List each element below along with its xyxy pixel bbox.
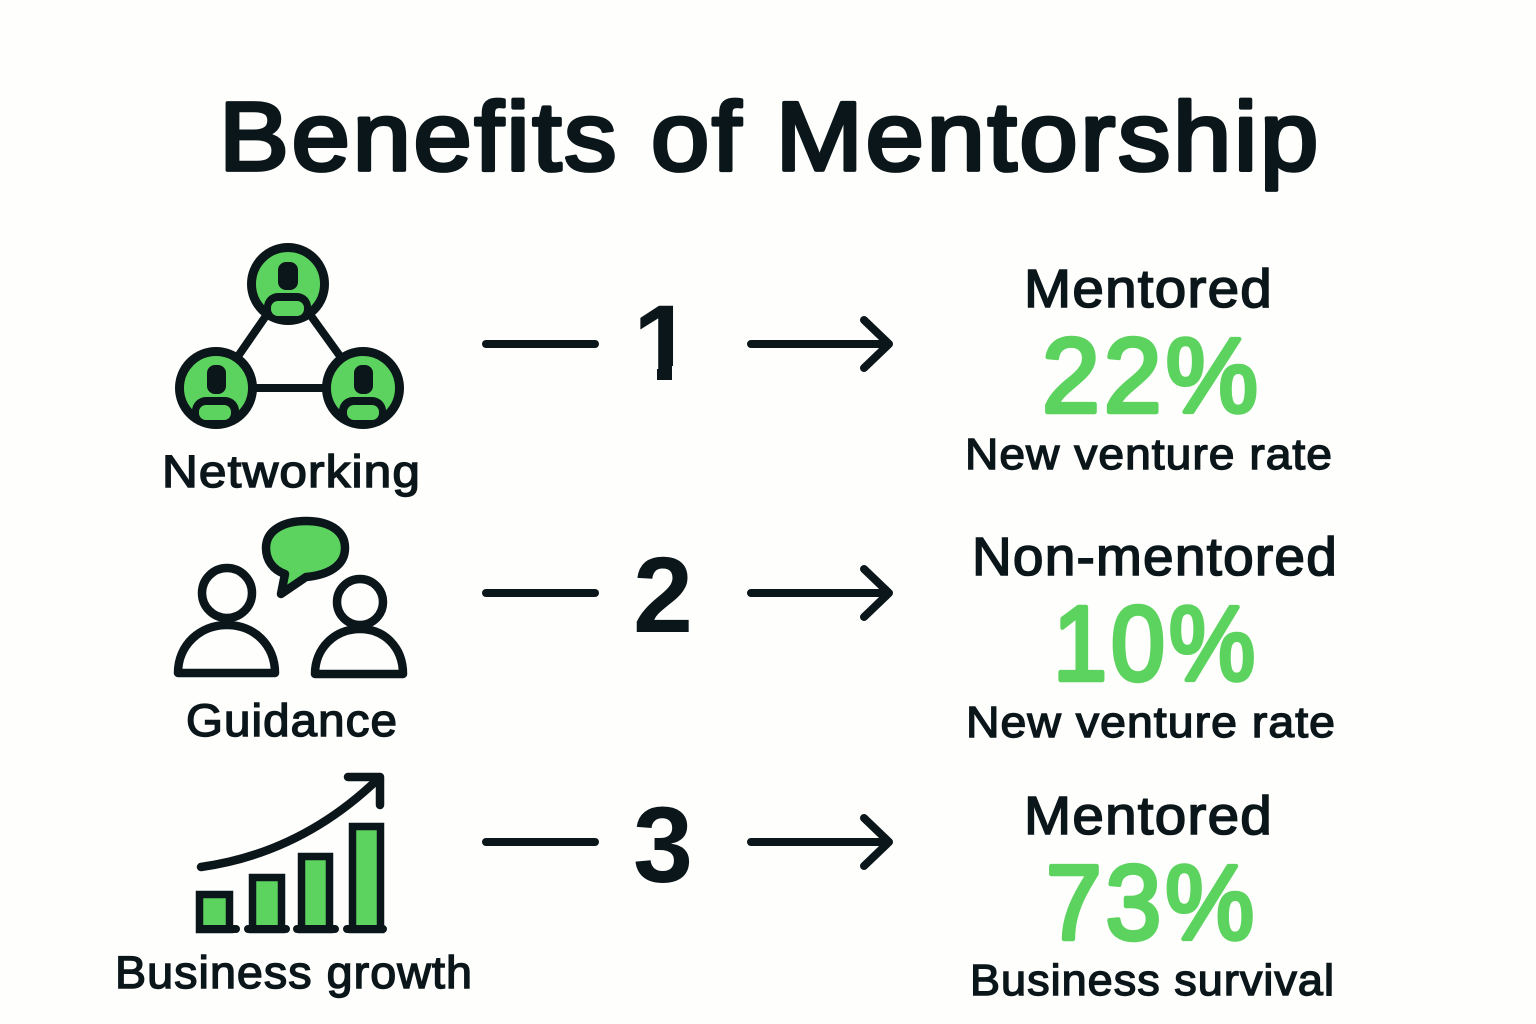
stat: mentored 22%: Mentored [1024,259,1273,319]
stat: non-mentored 10%: New venture rate [966,698,1336,747]
title: Benefits of Mentorship [219,82,1321,191]
connector line 3 [486,838,595,846]
number 3: 3 [633,784,693,905]
stat: mentored 22% [965,259,1333,479]
stat: mentored 73%: 73% [1046,844,1258,962]
arrow 2 [751,569,889,617]
row 2: guidance [178,521,1338,747]
icon: two people with speech bubble [178,521,403,674]
row 1: networking [162,248,1333,497]
stat: mentored 73% [970,786,1335,1005]
number 2: 2 [633,534,693,655]
stat: mentored 22%: New venture rate [965,430,1333,479]
stat: mentored 73%: Business survival [970,956,1335,1005]
label: Networking: Networking [162,446,421,497]
stat: non-mentored 10%: 10% [1053,585,1259,703]
icon: networking triangle of people [180,248,400,425]
number 1: 1 [633,282,693,403]
stat: non-mentored 10%: Non-mentored [972,527,1338,587]
row 3: business growth [115,777,1335,1005]
stat: mentored 73%: Mentored [1024,786,1273,846]
arrow 3 [751,818,889,866]
icon: bar chart with rising arrow [200,777,383,930]
label: Business growth: Business growth [115,947,473,998]
connector line 1 [486,340,595,348]
stat: non-mentored 10% [966,527,1338,747]
stat: mentored 22%: 22% [1042,317,1262,435]
connector line 2 [486,589,595,597]
arrow 1 [751,320,889,368]
label: Guidance: Guidance [186,695,398,746]
